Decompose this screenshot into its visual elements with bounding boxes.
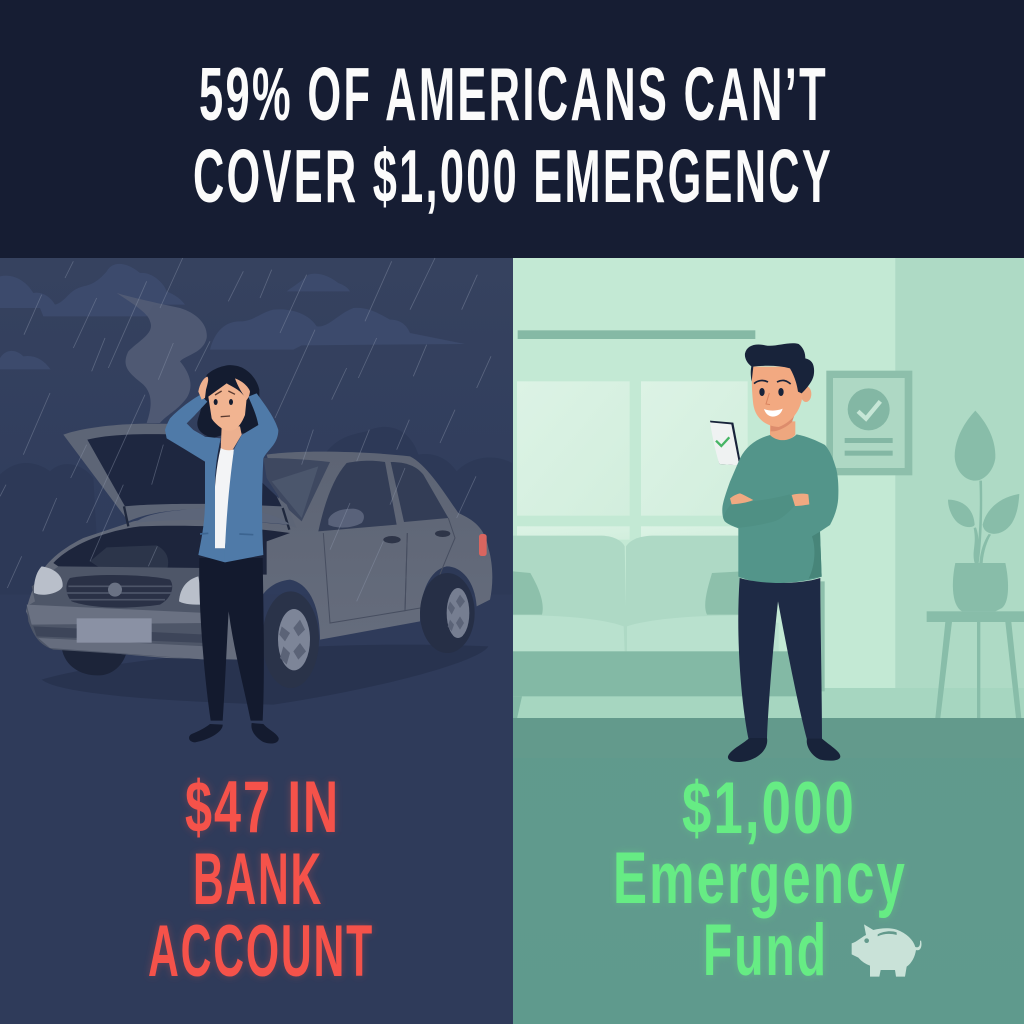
face [208,383,247,431]
front hub [278,609,310,670]
shoes [189,723,279,743]
trousers [738,578,822,740]
windshield [263,458,330,521]
neck [770,421,795,441]
blazer [165,395,225,562]
ear [801,386,811,402]
hair [745,343,814,393]
bumper and front fascia [27,566,207,660]
socks [728,738,840,762]
curtain rail [518,330,755,339]
illustration: calm living room [513,258,1024,762]
hands [730,493,809,506]
tail light [479,534,487,556]
caption glow [613,768,907,991]
background bushes [0,427,512,595]
smoke [117,293,207,423]
man [710,343,840,762]
engine bay [53,526,290,575]
wall right section [895,258,1024,691]
caption text [613,768,907,991]
caption glow: Fund [703,910,828,991]
trousers [199,558,264,721]
caption glow: $1,000 [682,768,856,849]
open hood [63,424,297,528]
hair back [197,365,259,438]
sofa [513,536,825,719]
front left wheel [62,648,127,675]
caption text: $47 IN [185,767,340,848]
sweater [722,434,838,583]
caption text: $1,000 [682,768,856,849]
phone [710,421,741,465]
roof and body [26,452,492,660]
white top [214,448,234,548]
floor [513,718,1024,758]
caption glow: Emergency [613,838,907,919]
caption glow: $47 IN [185,767,340,848]
headlights [34,566,63,595]
hood struts [124,506,289,530]
ground [0,595,512,1024]
front tyre [262,591,319,688]
door handles [383,536,401,543]
caption glow: ACCOUNT [148,911,374,992]
licence plate [77,618,152,643]
front side window [318,461,397,531]
pockets [200,533,253,535]
illustration: breakdown in the rain [0,258,512,1024]
panel: stressed side [0,258,513,1024]
rear tyre [420,573,475,653]
caption text [148,767,374,992]
framed certificate [826,371,912,475]
panel: prepared side [513,258,1024,1024]
header band [0,0,1024,258]
crossed arms [723,494,795,528]
icon: piggy bank [852,924,921,977]
woman [165,365,279,743]
skirting [513,688,1024,719]
caption text: ACCOUNT [148,911,374,992]
storm clouds [0,264,465,369]
right caption: $1,000 emergency fund [613,768,907,991]
left caption: $47 in bank account [148,767,374,992]
grille [66,575,172,608]
window [517,381,748,540]
smile [764,409,783,417]
rear side window [391,462,448,522]
cowl panel [135,508,290,525]
facial features [214,399,233,405]
neck and chest [221,426,242,451]
caption glow [148,767,374,992]
door outlines [323,518,455,623]
caption text: BANK [193,839,323,920]
car shadow [42,645,488,705]
hands [198,377,208,400]
head [752,367,803,427]
brows and eyes [759,388,784,396]
nose [766,393,770,405]
rain [0,258,491,601]
caption glow: BANK [193,839,323,920]
wall [513,258,1024,720]
grille badge [108,583,122,597]
caption text: Emergency [613,838,907,919]
rear hub [447,588,469,638]
caption text: Fund [703,910,828,991]
car [26,424,492,688]
headrest [328,509,364,528]
title [193,52,833,218]
plant and side table [927,411,1024,718]
